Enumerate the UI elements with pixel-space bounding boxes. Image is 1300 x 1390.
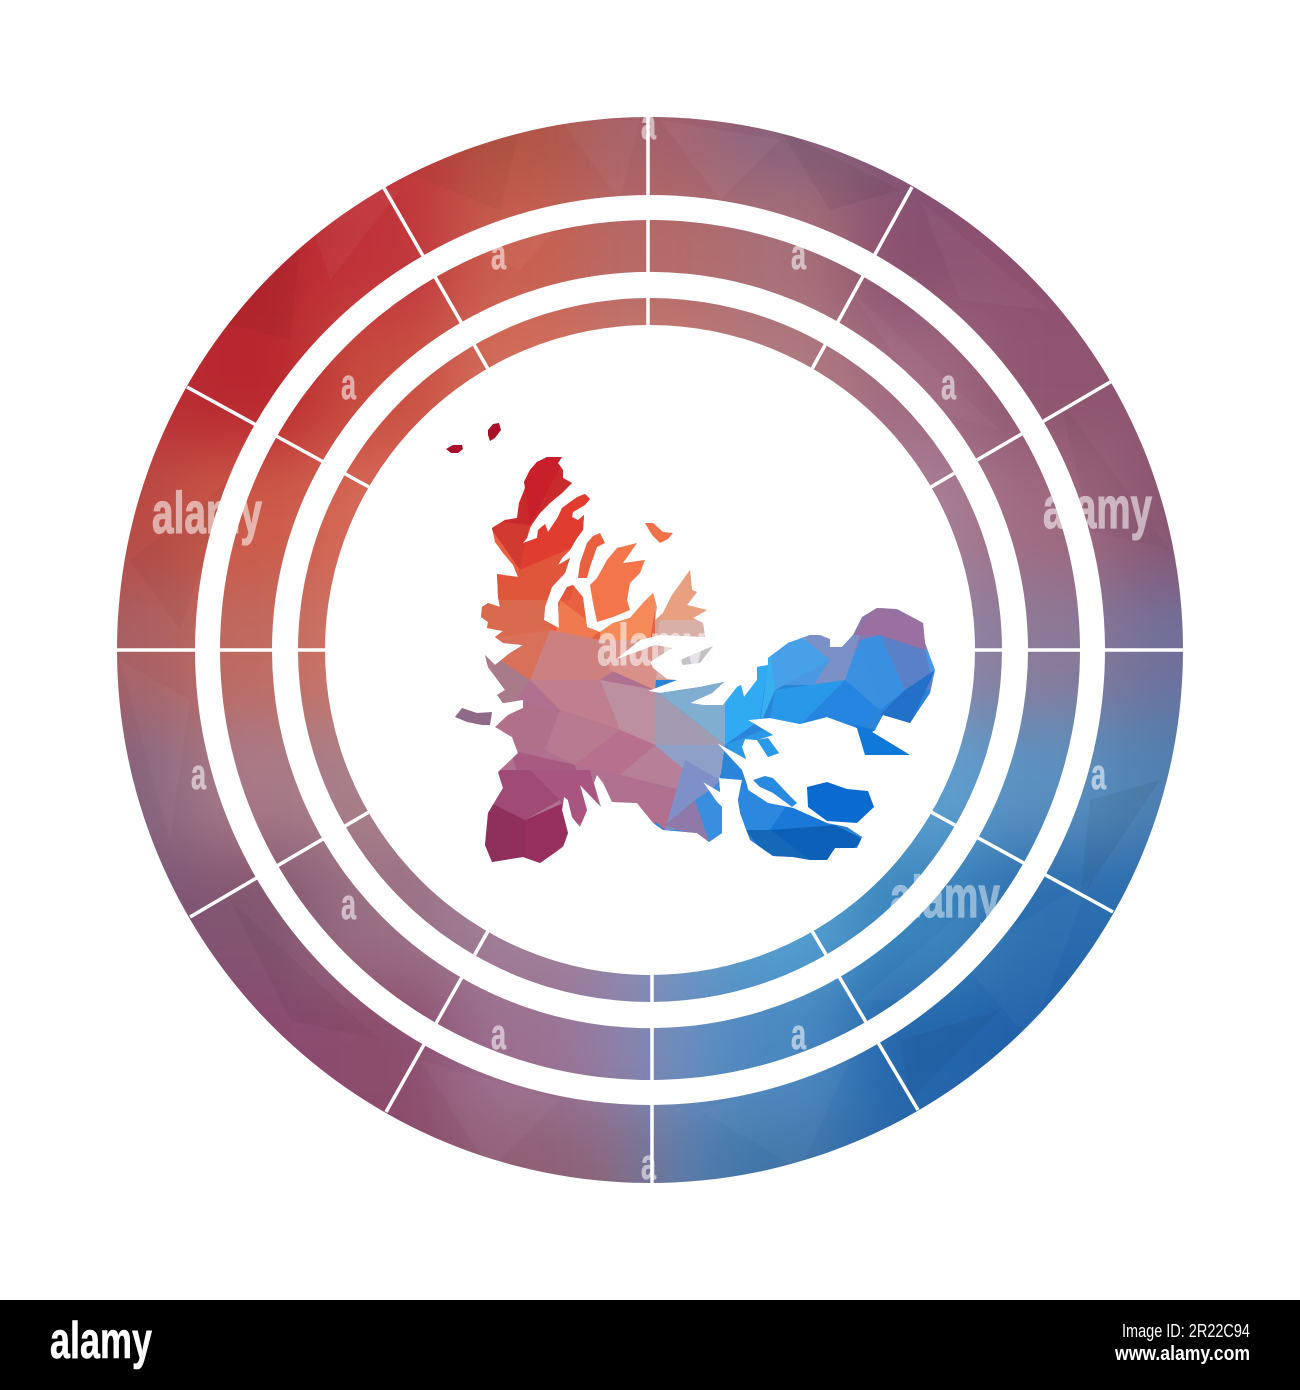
watermark text: a xyxy=(341,880,356,929)
watermark text: alamy xyxy=(597,613,705,678)
watermark text: a xyxy=(491,1010,506,1059)
footer logo: alamy xyxy=(50,1312,152,1370)
orange islet xyxy=(645,523,673,543)
south-east island xyxy=(807,782,874,823)
small north-east island xyxy=(680,646,713,665)
website: www.alamy.com xyxy=(1114,1343,1250,1365)
west islet xyxy=(455,708,492,725)
bottom black footer bar xyxy=(0,1300,1300,1390)
watermark text: alamy xyxy=(890,865,1000,930)
map of the islands in low poly colours xyxy=(440,420,945,880)
watermark text: a xyxy=(791,1010,806,1059)
concentric gradient badge rings xyxy=(117,117,1183,1183)
watermark text: alamy xyxy=(1043,476,1152,541)
watermark text: a xyxy=(641,100,656,149)
image id: Image ID: 2R22C94 xyxy=(1122,1321,1250,1341)
watermark text: a xyxy=(941,360,956,409)
main island body xyxy=(481,457,935,863)
watermark text: a xyxy=(191,750,206,799)
watermark text: a xyxy=(641,1140,656,1189)
watermark text: a xyxy=(341,360,356,409)
watermark text: alamy xyxy=(152,481,262,546)
ring segment dividers xyxy=(115,115,1185,1185)
north islets xyxy=(446,445,463,453)
watermark text: a xyxy=(491,230,506,279)
watermark text: a xyxy=(1091,750,1106,799)
watermark text: a xyxy=(791,230,806,279)
watermark text xyxy=(152,100,1152,1189)
finger islands xyxy=(578,533,605,578)
eastern strip island xyxy=(753,776,797,807)
